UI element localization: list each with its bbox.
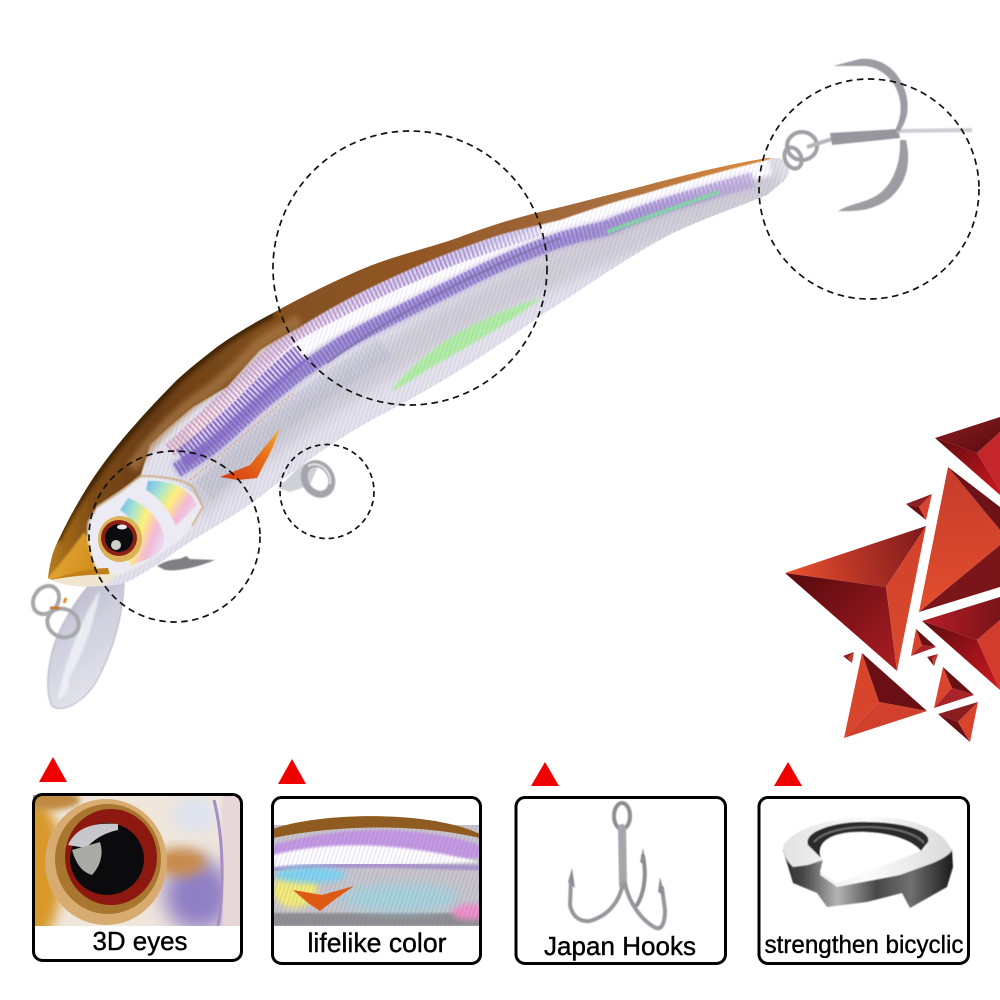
- fishing lure: [28, 59, 979, 709]
- golden snout: [48, 532, 98, 582]
- triangle: bottom large: [844, 653, 927, 738]
- lateral orange dotted line: [190, 393, 293, 480]
- tail green iridescent stripe: [607, 192, 720, 232]
- purple band underlay: [177, 180, 753, 470]
- triangle: small upper: [906, 494, 932, 520]
- ring dark wall: [783, 850, 953, 908]
- head plate: [87, 477, 203, 578]
- head plate outline: [97, 476, 203, 526]
- card border: [34, 794, 242, 960]
- dashed circle: eye: [89, 451, 260, 622]
- belly hook barb: [157, 556, 215, 570]
- ring inner rib: [814, 827, 924, 843]
- tail treble hook: [781, 59, 972, 211]
- nose split rings: [28, 581, 83, 642]
- triangle: right lower: [922, 597, 1000, 690]
- lower hook point: [838, 140, 908, 211]
- treble hook illustration: [568, 803, 665, 928]
- dashed circle: belly ring: [280, 444, 374, 538]
- red pointer triangle: 3D eyes: [39, 757, 67, 782]
- red geometric triangle cluster: [785, 417, 1000, 742]
- caption: Japan Hooks: [544, 931, 696, 961]
- dark edge of the back: [56, 313, 273, 540]
- ring hole: [810, 822, 927, 883]
- eye macro photo: [33, 795, 241, 926]
- tail split rings: [781, 132, 817, 171]
- card border: [516, 798, 726, 964]
- caption: 3D eyes: [92, 926, 188, 956]
- lure skin macro photo: [273, 816, 488, 926]
- lateral dark line: [327, 238, 560, 363]
- silver belly shading: [190, 180, 780, 505]
- lower jaw: [50, 574, 118, 586]
- brown back: [48, 158, 773, 581]
- upper white band: [193, 165, 770, 437]
- triangle: large centre: [919, 467, 1000, 612]
- scale texture: [79, 158, 788, 586]
- card border: [759, 798, 968, 964]
- hook shank: [807, 139, 832, 147]
- ring top face: [783, 817, 952, 887]
- rosy and purple scales under brown: [170, 228, 540, 450]
- green iridescent stripe: [390, 298, 540, 392]
- lure body: [48, 158, 789, 587]
- panel: lifelike color: [272, 798, 488, 964]
- belly split ring: [278, 459, 337, 499]
- triangle: large left: [785, 526, 926, 671]
- gold jaw strip: [50, 568, 110, 580]
- red pointer triangle: Japan Hooks: [531, 762, 559, 786]
- triangle: small fragments: [843, 629, 978, 742]
- iridescent cheek: [120, 498, 164, 566]
- tan lower brown band: [132, 320, 300, 468]
- red pointer triangle: strengthen bicyclic: [774, 762, 802, 786]
- clear diving lip: [48, 578, 124, 709]
- caption: lifelike color: [308, 928, 447, 958]
- split ring illustration: [783, 817, 953, 908]
- lure 3D eye: [98, 516, 142, 562]
- panel: strengthen bicyclic: [759, 798, 968, 964]
- front purple band widening: [182, 354, 300, 458]
- caption: strengthen bicyclic: [764, 931, 964, 959]
- orange fin mark: [220, 428, 280, 480]
- triangle: top right: [935, 417, 1000, 495]
- iridescent gill plate: [146, 481, 197, 526]
- body base silver: [76, 158, 789, 587]
- panel: 3D eyes: [10, 790, 242, 960]
- upper hook point: [833, 59, 908, 132]
- ring inner wall: [808, 822, 928, 858]
- card border: [272, 798, 480, 964]
- silver hatch below lateral line: [205, 348, 385, 490]
- dashed circle: body: [273, 131, 547, 405]
- red pointer triangle: lifelike color: [278, 759, 306, 784]
- purple band scales: [177, 180, 753, 470]
- dashed circle: tail hook: [759, 79, 979, 299]
- panel: Japan Hooks: [516, 798, 726, 964]
